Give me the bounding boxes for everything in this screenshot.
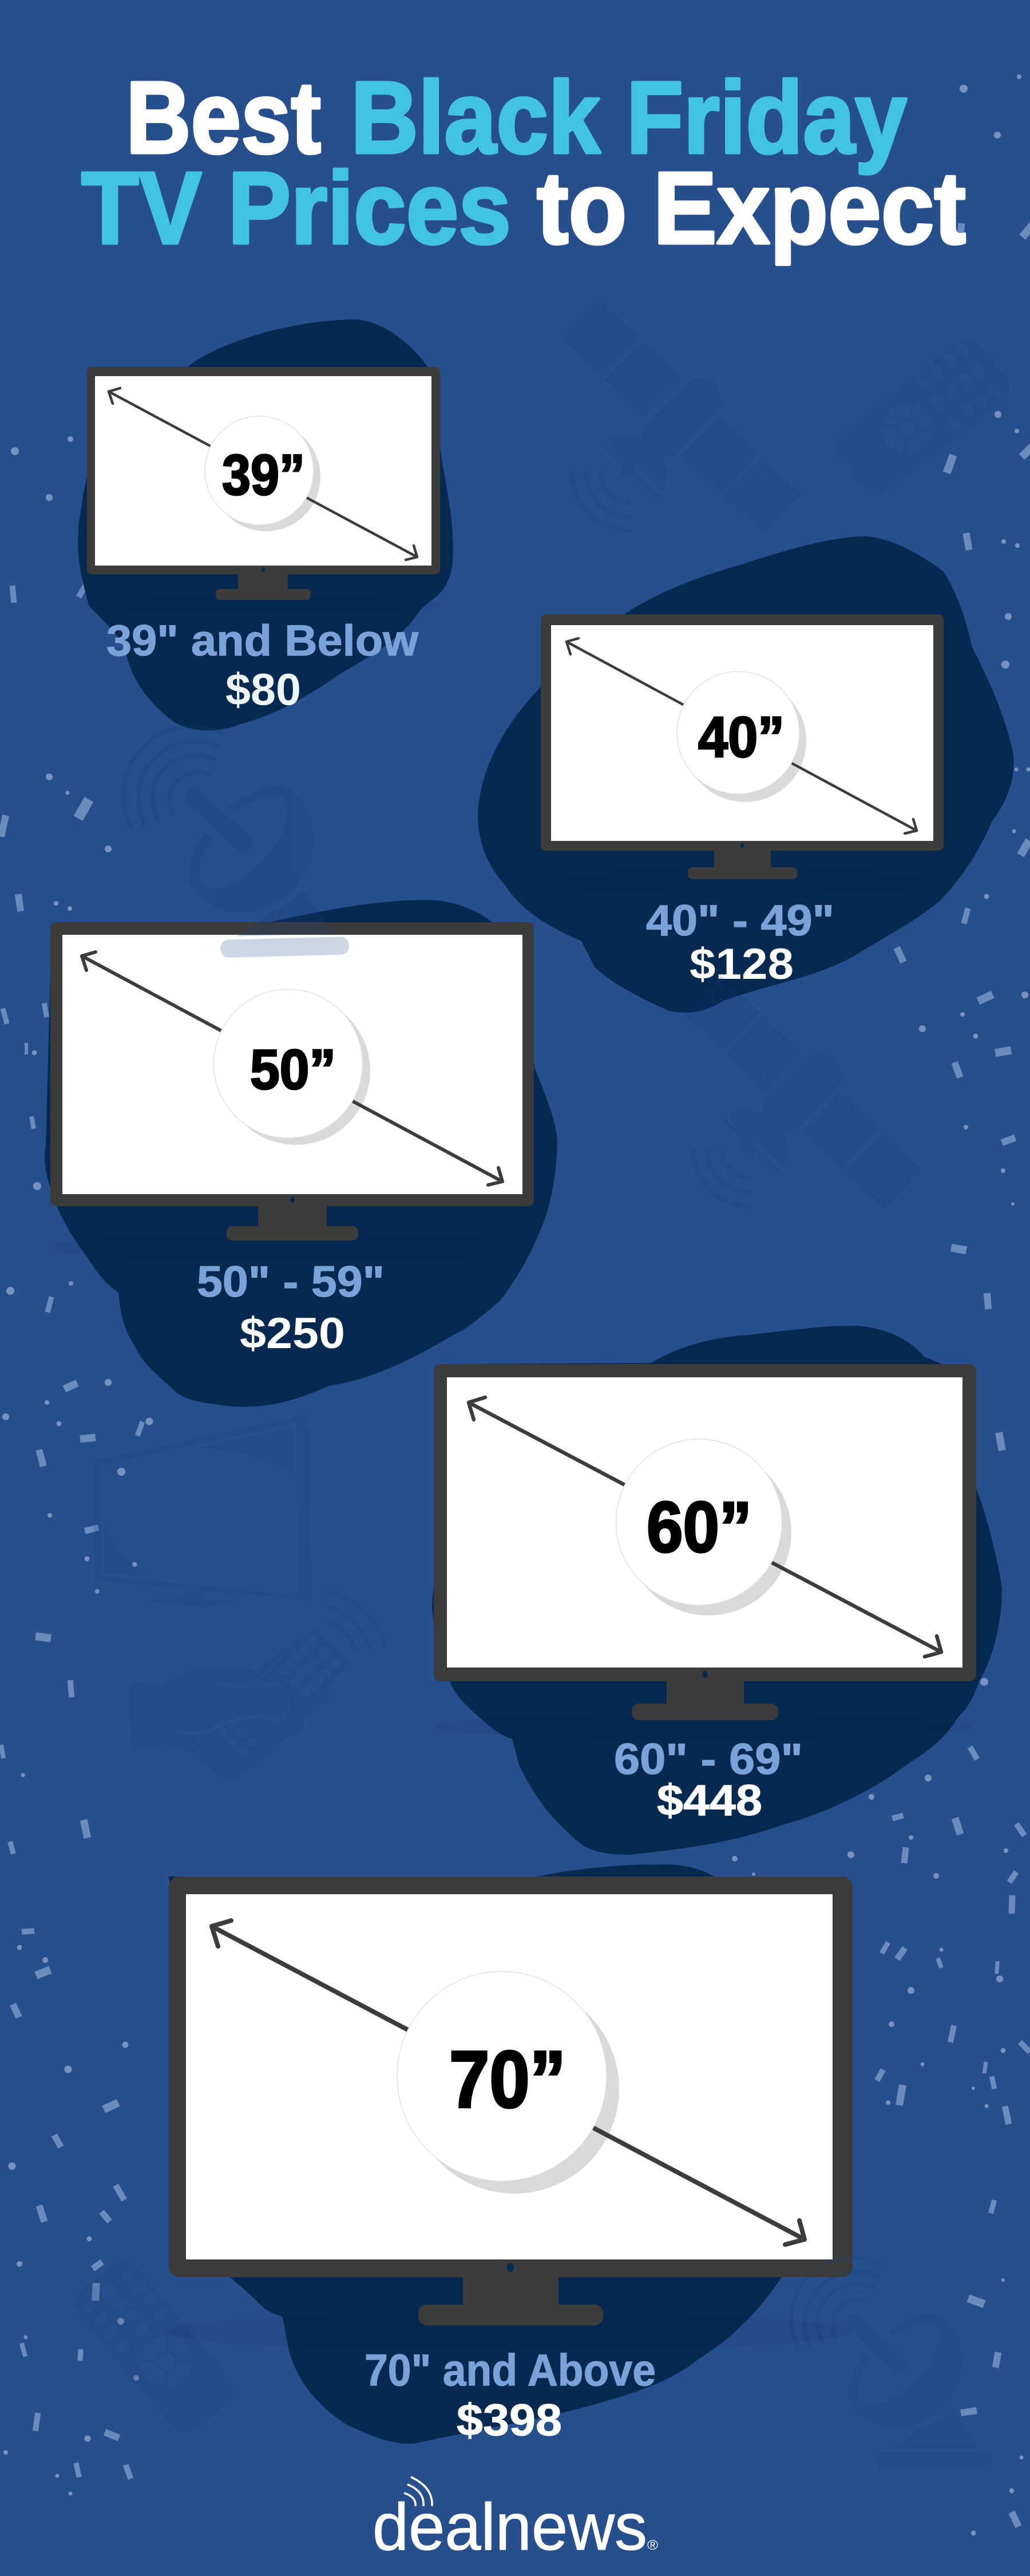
size badge: 70 inch: 70” <box>449 2034 566 2124</box>
size arrow: 70 inch <box>212 1921 805 2245</box>
badge shadow: 40 inch <box>684 679 806 802</box>
size label: 50 inch: 50" - 59" <box>197 1258 385 1306</box>
logo: dealnews <box>373 2477 658 2564</box>
monitor: 39 inch <box>87 367 440 600</box>
size label: 39 inch: 39" and Below <box>106 617 419 665</box>
icon: remote upper right <box>829 332 1017 501</box>
size badge: 60 inch: 60” <box>647 1488 752 1567</box>
icon: satellite lower <box>687 980 918 1206</box>
icon: hand holding remote <box>130 1591 387 1780</box>
blob: 60 inch <box>432 1326 1002 1855</box>
size arrow: 60 inch <box>469 1397 941 1657</box>
size arrow: 39 inch <box>109 388 417 560</box>
size badge: 39 inch: 39” <box>222 443 305 507</box>
size badge: 50 inch: 50” <box>250 1038 336 1101</box>
panel: 39 inch and below <box>78 319 453 730</box>
size badge: 40 inch: 40” <box>698 705 785 769</box>
panel: 70 inch and above <box>168 1864 853 2445</box>
blob: 40 inch <box>478 536 1014 1013</box>
price: 40 inch: $128 <box>690 940 794 989</box>
size badge: 50 inch <box>214 989 363 1138</box>
size arrow: 50 inch <box>82 952 502 1185</box>
price: 39 inch: $80 <box>225 664 301 714</box>
title: Black Friday <box>351 60 907 175</box>
blob: 70 inch <box>169 1864 782 2444</box>
icon: satellite dish lower <box>791 2258 992 2468</box>
size badge: 60 inch <box>616 1439 782 1605</box>
logo wordmark: dealnews <box>373 2490 647 2564</box>
floor shadow: 50 inch <box>49 1233 536 1262</box>
panel: 40 to 49 inch <box>478 536 1014 1013</box>
panel: 50 to 59 inch <box>45 900 557 1407</box>
size label: 40 inch: 40" - 49" <box>646 896 834 945</box>
floor shadow: 60 inch <box>434 1713 972 1740</box>
size label: 60 inch: 60" - 69" <box>614 1735 803 1784</box>
blob: 39 inch <box>78 319 453 730</box>
logo registered mark: ® <box>647 2538 658 2553</box>
floor shadow: 39 inch <box>86 595 441 615</box>
floor shadow: 70 inch <box>168 2312 852 2352</box>
badge shadow: 70 inch <box>410 1984 619 2194</box>
price: 50 inch: $250 <box>240 1309 345 1358</box>
badge shadow: 39 inch <box>212 422 320 531</box>
size label: 70 inch: 70" and Above <box>365 2345 656 2395</box>
blob: 50 inch <box>45 900 557 1407</box>
size badge: 40 inch <box>677 671 799 794</box>
monitor: 60 inch <box>434 1364 976 1720</box>
title: Best <box>126 60 321 175</box>
title: TV Prices <box>81 151 511 265</box>
title: to Expect <box>537 151 966 265</box>
icon: satellite dish upper <box>121 722 349 961</box>
title <box>81 60 966 265</box>
price: 70 inch: $398 <box>457 2395 562 2445</box>
floor shadow: 40 inch <box>544 868 941 897</box>
size badge: 70 inch <box>397 1971 607 2181</box>
badge shadow: 60 inch <box>625 1449 791 1615</box>
logo signal waves <box>404 2477 432 2506</box>
monitor: 40 inch <box>541 614 944 879</box>
monitor: 70 inch <box>169 1876 853 2325</box>
size badge: 39 inch <box>205 416 314 525</box>
icon: remote lower left <box>68 2254 241 2440</box>
badge shadow: 50 inch <box>221 996 370 1145</box>
size arrow: 40 inch <box>566 638 917 833</box>
monitor: 50 inch <box>50 922 534 1240</box>
panel: 60 to 69 inch <box>432 1326 1002 1855</box>
icon: flat screen television <box>93 1414 311 1607</box>
price: 60 inch: $448 <box>657 1776 762 1825</box>
icon: satellite upper <box>566 305 797 531</box>
